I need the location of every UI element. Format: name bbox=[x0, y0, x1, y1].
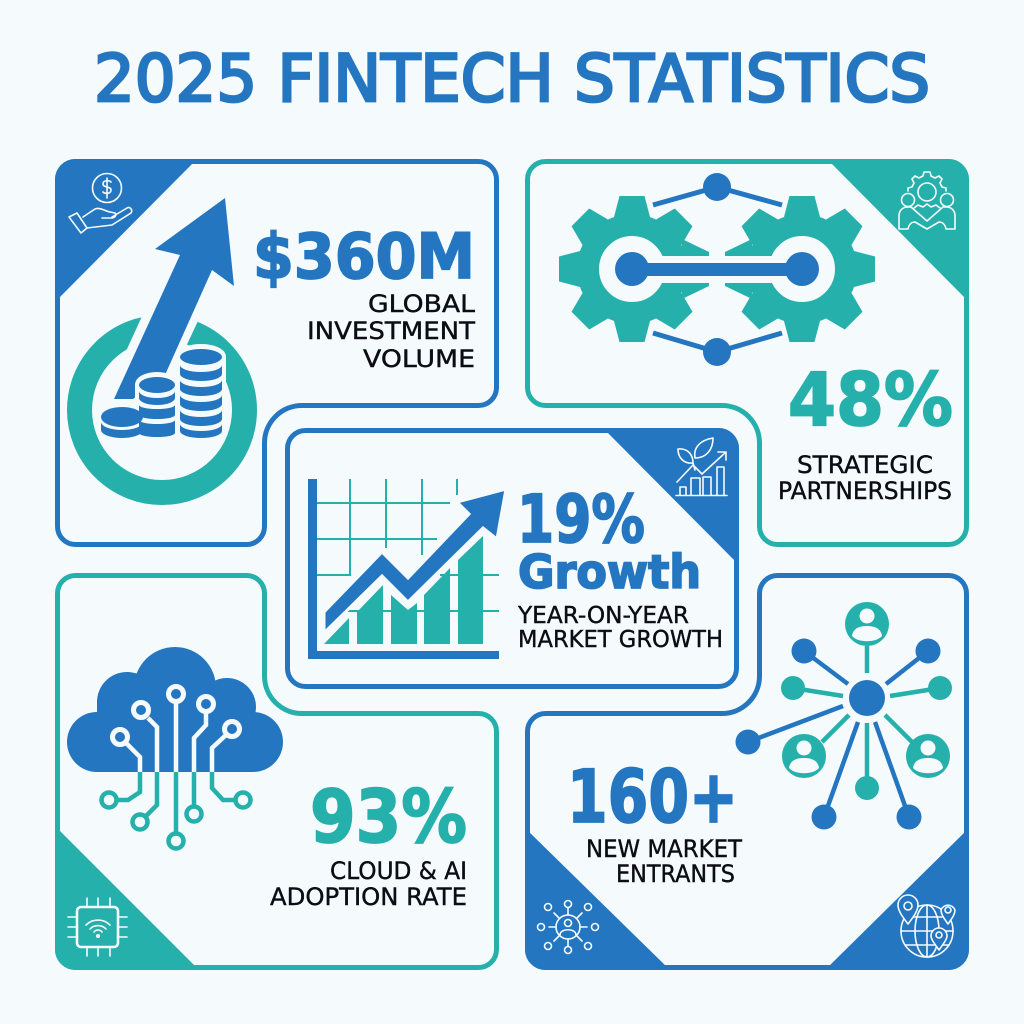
label: STRATEGIC bbox=[797, 451, 933, 479]
teal nodes bbox=[781, 676, 952, 800]
arrow bbox=[114, 198, 234, 400]
cloud with circuit bbox=[67, 647, 283, 848]
person nodes bbox=[782, 602, 950, 778]
panel: market growth bbox=[288, 428, 739, 686]
label: GLOBAL bbox=[368, 290, 476, 318]
stat: 93% bbox=[310, 775, 467, 860]
panel: strategic partnerships bbox=[528, 159, 969, 544]
icon: chip with wifi bbox=[68, 898, 127, 956]
circuit lines below bbox=[102, 772, 250, 848]
stat: $360M bbox=[253, 220, 475, 293]
panel border bbox=[58, 162, 496, 544]
label bbox=[586, 835, 742, 888]
coin stacks bbox=[101, 348, 222, 440]
stat: 19% bbox=[517, 481, 645, 558]
gear right bbox=[725, 196, 875, 342]
stat: 48% bbox=[788, 358, 953, 443]
hub bbox=[849, 680, 885, 716]
panel: cloud and AI adoption bbox=[55, 576, 496, 970]
corner tab right bbox=[825, 828, 969, 970]
stat: 160+ bbox=[567, 755, 738, 840]
label: YEAR-ON-YEAR bbox=[517, 603, 689, 629]
gears and connector bbox=[559, 173, 875, 366]
icon: plant and bars bbox=[676, 438, 727, 496]
blue nodes bbox=[736, 638, 940, 830]
label bbox=[307, 290, 476, 373]
label: ENTRANTS bbox=[616, 860, 735, 888]
gear left bbox=[559, 196, 709, 342]
subheading: Growth bbox=[518, 545, 701, 599]
label: PARTNERSHIPS bbox=[778, 477, 952, 505]
trend arrow bbox=[324, 489, 506, 633]
label: INVESTMENT bbox=[307, 317, 475, 345]
icon: people network bbox=[538, 900, 598, 954]
corner tab bbox=[55, 826, 199, 970]
panel border bbox=[528, 162, 967, 544]
title: 2025 FINTECH STATISTICS bbox=[94, 42, 930, 117]
chart bbox=[308, 479, 506, 659]
icon: globe with pins bbox=[898, 895, 955, 957]
label: MARKET GROWTH bbox=[518, 627, 723, 653]
label bbox=[778, 451, 952, 505]
label: CLOUD & AI bbox=[330, 857, 467, 885]
label: ADOPTION RATE bbox=[270, 883, 467, 911]
circuit lines in cloud bbox=[112, 686, 240, 772]
axes bbox=[308, 479, 499, 659]
icon: hand holding coin bbox=[69, 174, 132, 233]
icon: team with gear bbox=[899, 172, 955, 229]
corner tab bbox=[603, 428, 739, 565]
network diagram bbox=[736, 602, 952, 830]
corner tab left bbox=[525, 828, 670, 970]
spokes bbox=[748, 646, 940, 817]
label: NEW MARKET bbox=[586, 835, 742, 863]
label: VOLUME bbox=[363, 345, 475, 373]
label bbox=[270, 857, 467, 911]
label bbox=[517, 603, 723, 653]
panel border bbox=[288, 430, 736, 686]
cloud shape bbox=[67, 647, 283, 772]
bars bbox=[324, 536, 483, 644]
panel border bbox=[528, 576, 967, 968]
corner tab bbox=[55, 159, 197, 302]
ring bbox=[80, 328, 244, 492]
corner tab bbox=[827, 159, 969, 302]
panel: new market entrants bbox=[525, 576, 969, 970]
panel border bbox=[58, 576, 496, 968]
panel: global investment volume bbox=[55, 159, 496, 544]
